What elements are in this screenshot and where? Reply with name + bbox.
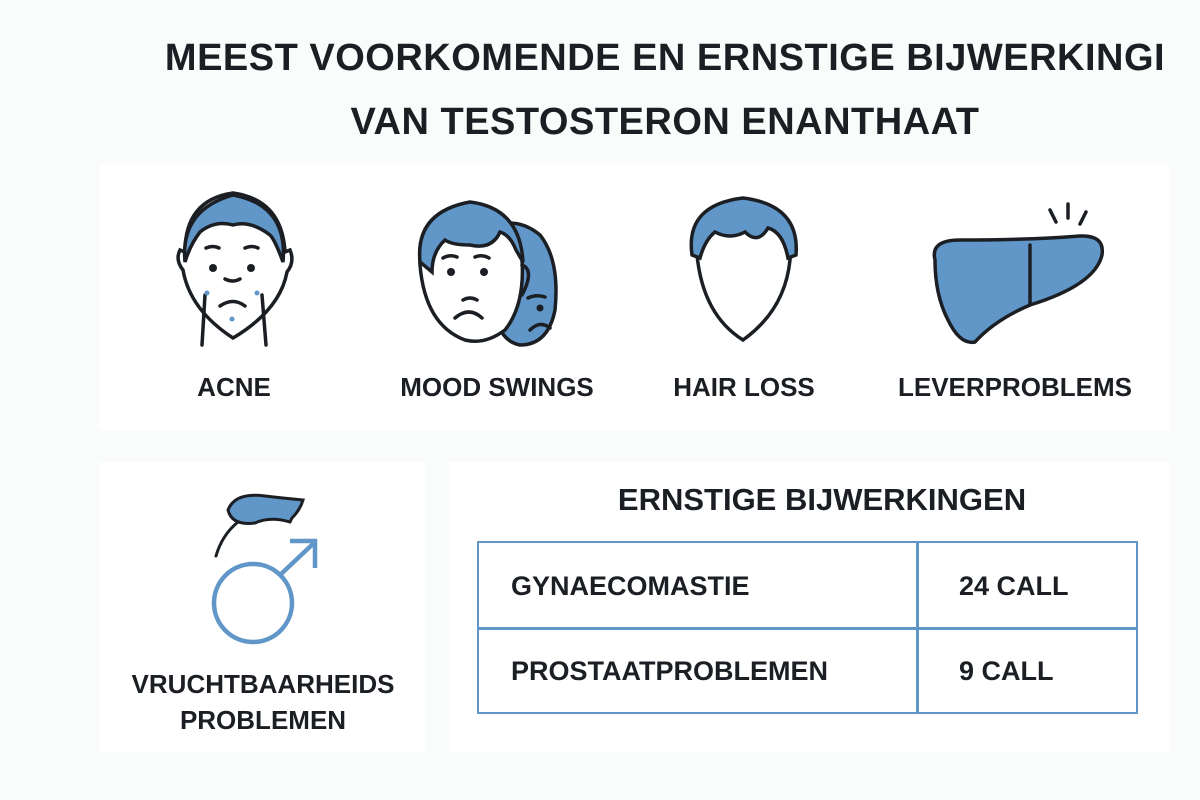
label: hair loss: HAIR LOSS <box>673 372 815 402</box>
row: prostaatproblemen: PROSTAATPROBLEMEN <box>511 656 828 686</box>
icon: male symbol with hair <box>212 494 318 644</box>
table: serious side effects <box>477 541 1138 714</box>
row: gynaecomastie: GYNAECOMASTIE <box>511 571 750 601</box>
icon: liver <box>932 202 1104 344</box>
icon: hair loss head <box>690 196 798 342</box>
label: mood swings: MOOD SWINGS <box>400 372 594 402</box>
label: fertility problems: PROBLEMEN <box>180 705 346 735</box>
label: fertility problems: VRUCHTBAARHEIDS <box>132 669 394 699</box>
icon: mood swings faces <box>418 200 558 347</box>
title: VAN TESTOSTERON ENANTHAAT <box>351 101 979 143</box>
panel: top icons <box>100 165 1170 430</box>
panel: fertility <box>100 462 425 752</box>
title: MEEST VOORKOMENDE EN ERNSTIGE BIJWERKINGI <box>165 37 1165 79</box>
title <box>165 37 1165 143</box>
value: 24 call: 24 CALL <box>959 571 1069 601</box>
label: leverproblems: LEVERPROBLEMS <box>898 372 1132 402</box>
value: 9 call: 9 CALL <box>959 656 1054 686</box>
label: acne: ACNE <box>197 372 271 402</box>
icon: acne face <box>176 191 294 347</box>
panel: serious table <box>450 462 1170 752</box>
label: fertility problems <box>132 669 394 735</box>
heading: serious side effects: ERNSTIGE BIJWERKINGEN <box>618 482 1026 517</box>
